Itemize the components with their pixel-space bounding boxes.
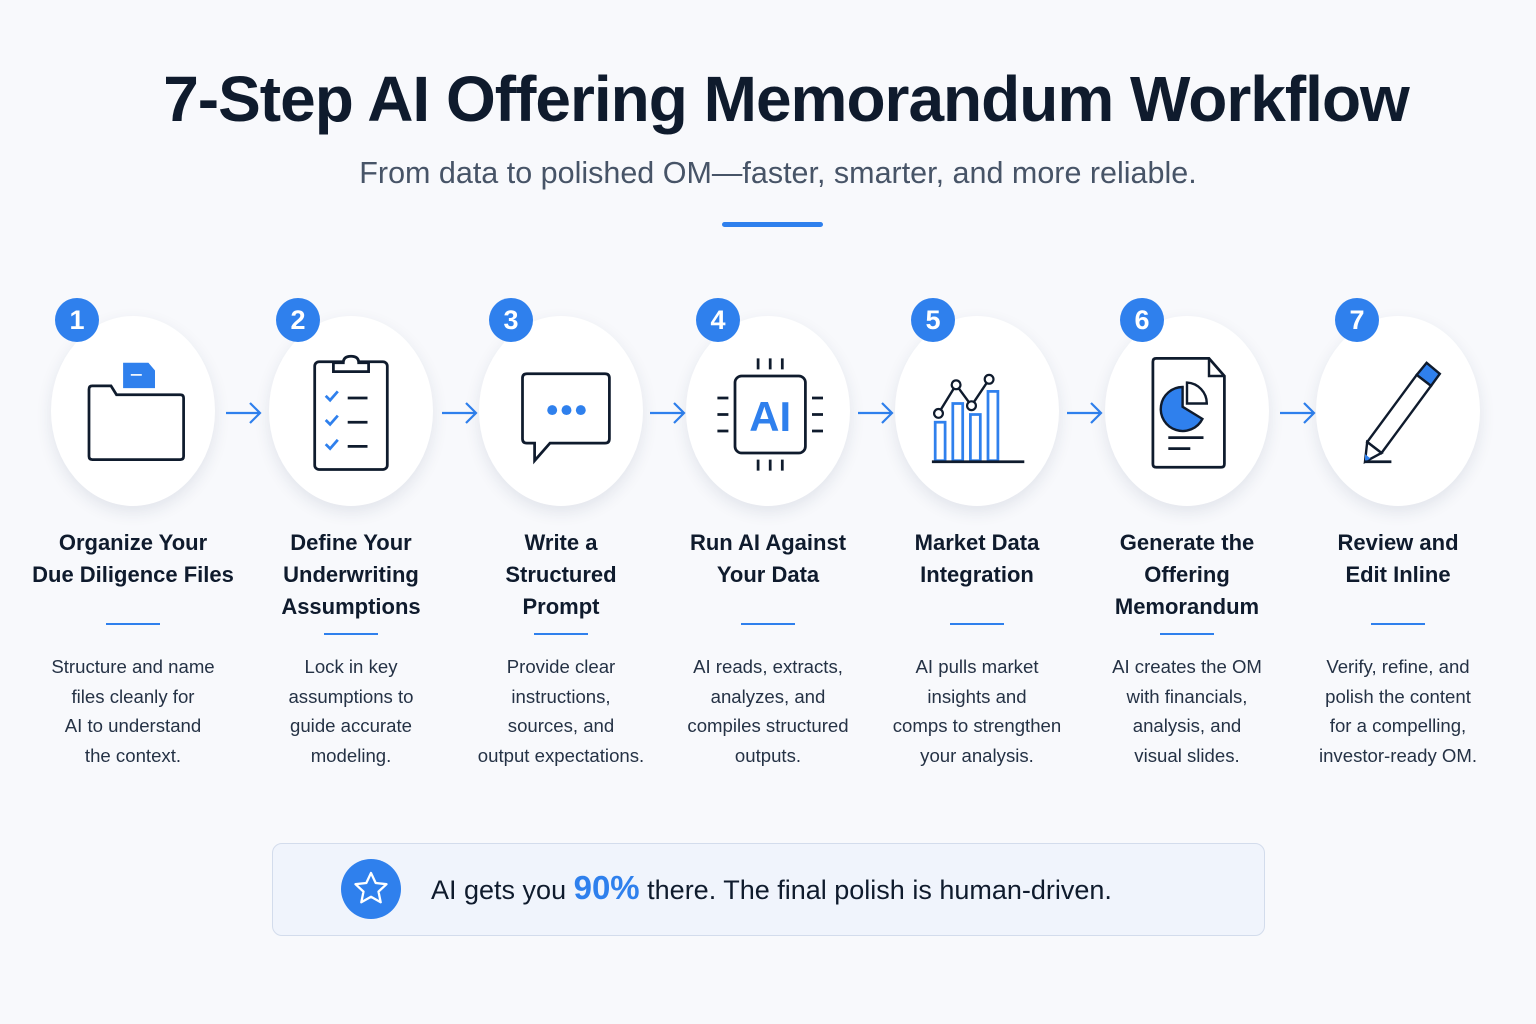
description	[478, 656, 644, 766]
badge 5	[911, 298, 955, 342]
heading	[1115, 530, 1259, 619]
description: instructions,	[511, 686, 611, 707]
description: outputs.	[735, 745, 801, 766]
description: comps to strengthen	[893, 715, 1061, 736]
description: for a compelling,	[1330, 715, 1466, 736]
description: AI pulls market	[916, 656, 1038, 677]
badge 3: 3	[503, 305, 519, 335]
heading: Edit Inline	[1345, 562, 1451, 587]
description: compiles structured	[687, 715, 849, 736]
description: insights and	[927, 686, 1027, 707]
heading: Memorandum	[1115, 594, 1259, 619]
badge 5: 5	[925, 305, 941, 335]
heading	[915, 530, 1040, 587]
badge 2	[276, 298, 320, 342]
description: Structure and name	[51, 656, 215, 677]
accent bar	[722, 222, 823, 227]
description: AI to understand	[65, 715, 201, 736]
icon: chat bubble	[521, 372, 611, 464]
badge 6: 6	[1134, 305, 1150, 335]
description: Verify, refine, and	[1326, 656, 1470, 677]
description: sources, and	[508, 715, 614, 736]
icon: AI chip: AI	[749, 393, 791, 440]
icon: report document	[1152, 357, 1226, 469]
callout text: AI gets you 90% there. The final polish is human-driven.	[431, 869, 1112, 906]
heading: Prompt	[522, 594, 600, 619]
heading	[32, 530, 234, 587]
callout	[272, 843, 1265, 936]
icon: AI chip	[717, 358, 823, 471]
badge 7: 7	[1349, 305, 1365, 335]
step 3	[477, 298, 645, 766]
description	[51, 656, 215, 766]
description: your analysis.	[920, 745, 1034, 766]
description: AI reads, extracts,	[693, 656, 843, 677]
description	[1319, 656, 1477, 766]
description: with financials,	[1127, 686, 1247, 707]
icon: clipboard	[313, 354, 389, 471]
heading	[281, 530, 421, 619]
badge 6	[1120, 298, 1164, 342]
heading: Due Diligence Files	[32, 562, 234, 587]
description: investor-ready OM.	[1319, 745, 1477, 766]
description	[288, 656, 414, 766]
heading	[690, 530, 846, 587]
badge 1	[55, 298, 99, 342]
arrow	[1280, 402, 1316, 424]
step 1	[32, 298, 234, 766]
description	[893, 656, 1061, 766]
title: 7-Step AI Offering Memorandum Workflow	[163, 63, 1409, 135]
heading: Structured	[505, 562, 617, 587]
badge 2: 2	[290, 305, 306, 335]
description: analyzes, and	[711, 686, 825, 707]
description: modeling.	[311, 745, 391, 766]
badge 4	[696, 298, 740, 342]
icon: pencil	[1364, 361, 1442, 464]
description: Lock in key	[304, 656, 398, 677]
heading: Define Your	[290, 530, 412, 555]
arrow	[858, 402, 894, 424]
step 5	[893, 298, 1061, 766]
heading: Review and	[1337, 530, 1459, 555]
description: Provide clear	[507, 656, 615, 677]
description: AI creates the OM	[1112, 656, 1262, 677]
arrow	[1067, 402, 1102, 424]
description: the context.	[85, 745, 181, 766]
heading: Assumptions	[281, 594, 421, 619]
badge 7	[1335, 298, 1379, 342]
arrow	[650, 402, 686, 424]
step 2	[267, 298, 435, 766]
description: polish the content	[1325, 686, 1471, 707]
badge 1: 1	[69, 305, 85, 335]
heading	[1337, 530, 1459, 587]
heading: Organize Your	[59, 530, 207, 555]
heading: Integration	[920, 562, 1034, 587]
badge 4: 4	[710, 305, 726, 335]
arrow	[442, 402, 478, 424]
description: assumptions to	[288, 686, 414, 707]
description: analysis, and	[1133, 715, 1241, 736]
description: output expectations.	[478, 745, 644, 766]
heading: Underwriting	[283, 562, 419, 587]
arrow	[226, 402, 262, 424]
icon: bar and line chart	[932, 374, 1024, 464]
subtitle: From data to polished OM—faster, smarter, and more reliable.	[359, 156, 1197, 190]
heading: Offering	[1144, 562, 1230, 587]
heading: Run AI Against	[690, 530, 846, 555]
heading: Market Data	[915, 530, 1039, 555]
heading: Write a	[525, 530, 597, 555]
heading: Generate the	[1120, 530, 1254, 555]
description: files cleanly for	[72, 686, 194, 707]
icon: star	[341, 859, 401, 919]
step 6	[1103, 298, 1271, 766]
description: guide accurate	[290, 715, 412, 736]
badge 3	[489, 298, 533, 342]
heading	[505, 530, 617, 619]
icon: folder	[88, 362, 185, 461]
description	[1112, 656, 1262, 766]
step 7	[1314, 298, 1482, 766]
description	[687, 656, 849, 766]
heading: Your Data	[717, 562, 819, 587]
description: visual slides.	[1134, 745, 1240, 766]
step 4	[684, 298, 852, 766]
